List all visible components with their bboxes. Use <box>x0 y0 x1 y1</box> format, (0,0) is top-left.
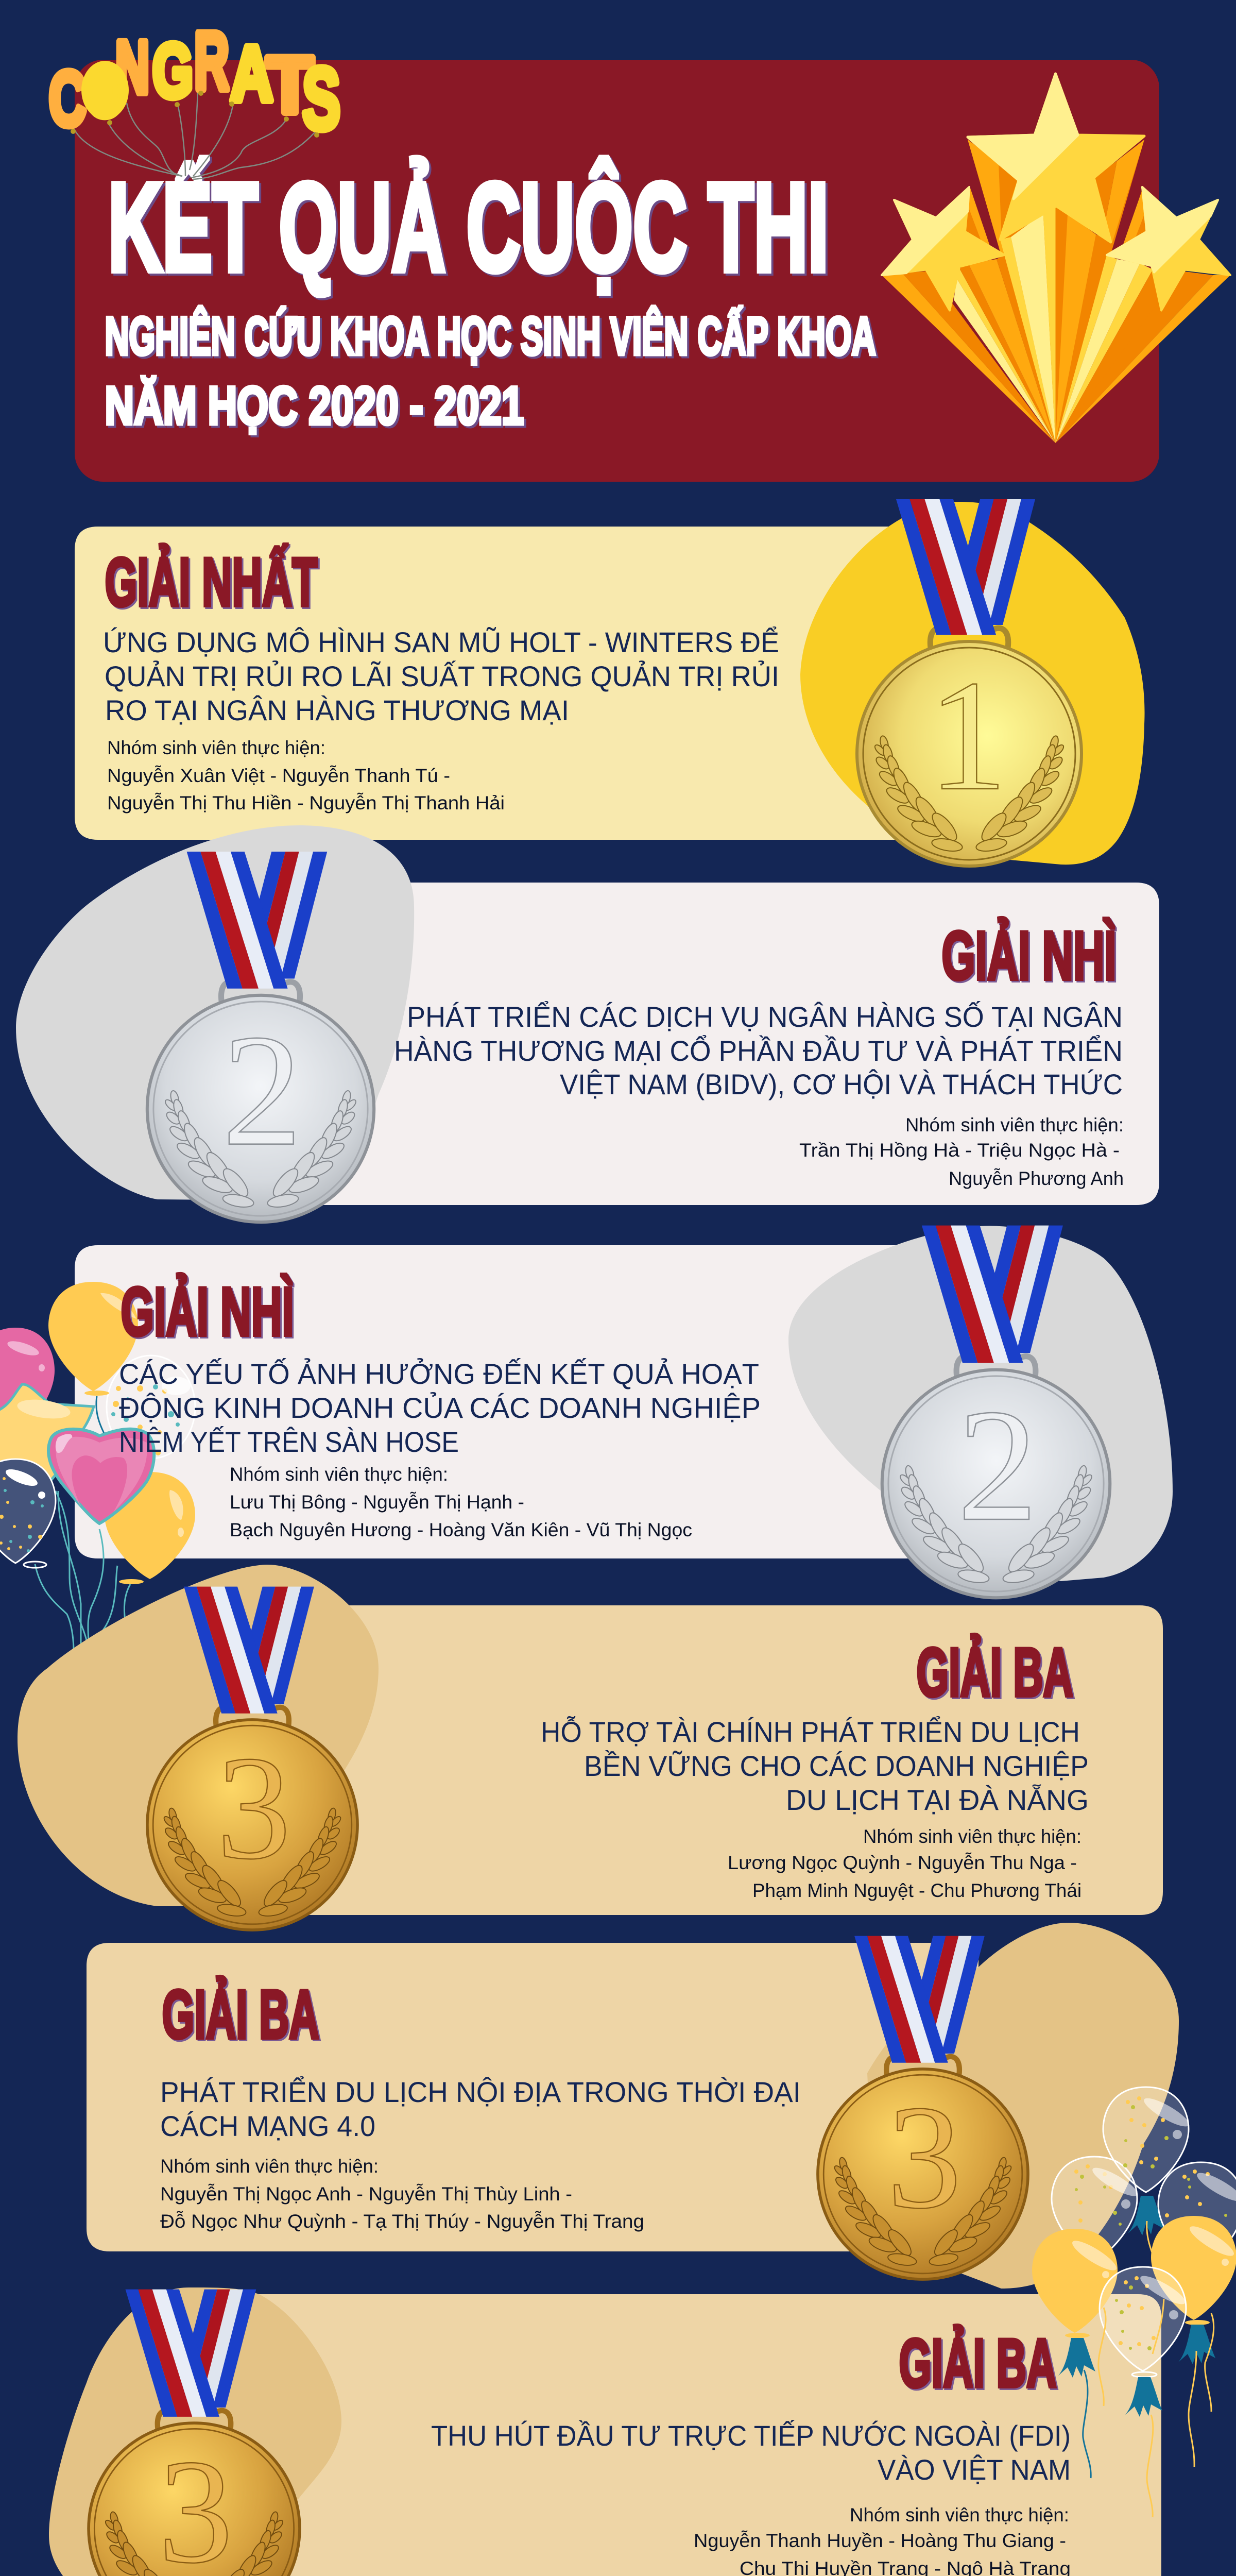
panel: first prize background <box>75 527 927 840</box>
icon: congrats balloons: R <box>194 15 229 107</box>
team <box>799 1114 1124 1189</box>
icon: congrats balloons: S <box>302 50 340 148</box>
project title: VIỆT NAM (BIDV), CƠ HỘI VÀ THÁCH THỨC <box>560 1068 1123 1100</box>
right cone <box>1056 190 1230 443</box>
blob: yellow shape behind gold medal <box>800 502 1145 865</box>
project title <box>431 2419 1071 2486</box>
icon: congrats balloons: G <box>152 28 193 113</box>
panel: third prize B text <box>160 1976 801 2232</box>
big star <box>968 74 1144 242</box>
central cone <box>968 140 1144 443</box>
icon: bronze medal A <box>147 1587 357 1930</box>
project title: HỖ TRỢ TÀI CHÍNH PHÁT TRIỂN DU LỊCH <box>541 1716 1080 1748</box>
icon: congrats balloons: T <box>267 40 313 129</box>
team: Đỗ Ngọc Như Quỳnh - Tạ Thị Thúy - Nguyễn Thị Trang <box>160 2211 644 2232</box>
project title: THU HÚT ĐẦU TƯ TRỰC TIẾP NƯỚC NGOÀI (FDI) <box>431 2419 1071 2452</box>
icon: silver medal A <box>147 852 374 1222</box>
panel: header banner <box>75 60 1159 482</box>
project title <box>119 1358 761 1458</box>
heading: GIẢI BA <box>917 1634 1073 1710</box>
icon: balloons left <box>0 1282 195 1651</box>
project title: PHÁT TRIỂN DU LỊCH NỘI ĐỊA TRONG THỜI ĐẠI <box>160 2076 801 2108</box>
panel: third prize C background <box>206 2294 1161 2576</box>
project title <box>103 626 779 726</box>
heading: GIẢI NHÌ <box>941 917 1117 994</box>
team <box>728 1826 1082 1901</box>
project title: CÁCH MẠNG 4.0 <box>160 2110 375 2142</box>
icon: bronze medal A: 3 <box>217 1726 291 1890</box>
icon: congrats balloons: A <box>230 30 273 117</box>
icon: gold medal 1: 1 <box>928 648 1007 823</box>
panel: second prize B text <box>119 1274 761 1540</box>
team: Bạch Nguyên Hương - Hoàng Văn Kiên - Vũ Thị Ngọc <box>230 1519 692 1540</box>
team: Nhóm sinh viên thực hiện: <box>160 2156 379 2177</box>
team: Trần Thị Hồng Hà - Triệu Ngọc Hà - <box>799 1140 1120 1161</box>
project title: RO TẠI NGÂN HÀNG THƯƠNG MẠI <box>105 694 569 726</box>
heading: GIẢI BA <box>899 2325 1057 2402</box>
panel: third prize A text <box>541 1634 1089 1901</box>
left star <box>882 187 1004 310</box>
project title: BỀN VỮNG CHO CÁC DOANH NGHIỆP <box>584 1750 1089 1782</box>
panel: second prize B background <box>75 1245 927 1558</box>
heading: GIẢI NHẤT <box>105 543 317 620</box>
subtitle line 2: NĂM HỌC 2020 - 2021 <box>105 376 524 436</box>
icon: bronze medal C <box>89 2290 300 2576</box>
team: Nhóm sinh viên thực hiện: <box>850 2504 1069 2526</box>
team: Nguyễn Phương Anh <box>949 1168 1124 1189</box>
blob: tan shape behind bronze medal A <box>18 1565 379 1906</box>
heading: GIẢI NHÌ <box>121 1274 294 1350</box>
team: Nhóm sinh viên thực hiện: <box>863 1826 1082 1847</box>
project title: DU LỊCH TẠI ĐÀ NẴNG <box>786 1784 1089 1816</box>
project title: QUẢN TRỊ RỦI RO LÃI SUẤT TRONG QUẢN TRỊ RỦI <box>105 660 779 692</box>
icon: congrats balloons: C <box>49 55 86 142</box>
team: Lương Ngọc Quỳnh - Nguyễn Thu Nga - <box>728 1852 1077 1873</box>
panel: second prize A text <box>394 917 1124 1189</box>
project title: HÀNG THƯƠNG MẠI CỔ PHẦN ĐẦU TƯ VÀ PHÁT TRIỂN <box>394 1035 1123 1067</box>
panel: third prize B background <box>87 1943 978 2251</box>
icon: silver medal B: 2 <box>957 1376 1038 1554</box>
panel: third prize A background <box>258 1605 1163 1915</box>
project title <box>160 2076 801 2142</box>
project title: PHÁT TRIỂN CÁC DỊCH VỤ NGÂN HÀNG SỐ TẠI NGÂN <box>407 1001 1123 1033</box>
team: Nguyễn Thanh Huyền - Hoàng Thu Giang - <box>694 2530 1066 2551</box>
project title: NIÊM YẾT TRÊN SÀN HOSE <box>119 1426 459 1458</box>
panel: third prize C text <box>431 2325 1071 2576</box>
heading: GIẢI BA <box>162 1976 319 2053</box>
icon: congrats balloons: N <box>115 26 149 109</box>
blob: grey shape behind silver medal B <box>788 1226 1173 1581</box>
team <box>694 2504 1071 2576</box>
left cone <box>882 188 1056 443</box>
icon: foil heart balloon <box>48 1429 154 1523</box>
panel: first prize text <box>103 543 779 814</box>
team: Nguyễn Thị Thu Hiền - Nguyễn Thị Thanh Hải <box>107 792 505 814</box>
icon: bronze medal B: 3 <box>887 2075 962 2240</box>
icon: silver medal B <box>882 1226 1110 1598</box>
panel: second prize A background <box>258 883 1159 1205</box>
blob: tan shape behind bronze medal B <box>867 1923 1179 2289</box>
icon: congrats balloons <box>49 15 340 179</box>
icon: congrats balloons: O <box>85 53 125 131</box>
icon: balloons right <box>1032 2087 1236 2517</box>
team: Nhóm sinh viên thực hiện: <box>230 1464 448 1485</box>
team: Nhóm sinh viên thực hiện: <box>107 737 325 758</box>
project title <box>541 1716 1089 1816</box>
team: Lưu Thị Bông - Nguyễn Thị Hạnh - <box>230 1492 524 1513</box>
right star <box>1107 187 1230 310</box>
icon: shooting stars <box>882 74 1230 443</box>
team: Nhóm sinh viên thực hiện: <box>905 1114 1124 1136</box>
icon: silver medal A: 2 <box>222 1002 302 1179</box>
project title: VÀO VIỆT NAM <box>878 2453 1071 2486</box>
project title: CÁC YẾU TỐ ẢNH HƯỞNG ĐẾN KẾT QUẢ HOẠT <box>119 1358 759 1390</box>
icon: bronze medal B <box>818 1936 1028 2279</box>
team: Nguyễn Xuân Việt - Nguyễn Thanh Tú - <box>107 765 450 786</box>
project title: ĐỘNG KINH DOANH CỦA CÁC DOANH NGHIỆP <box>119 1392 761 1424</box>
team: Phạm Minh Nguyệt - Chu Phương Thái <box>752 1880 1082 1901</box>
project title: ỨNG DỤNG MÔ HÌNH SAN MŨ HOLT - WINTERS ĐỂ <box>103 626 779 658</box>
icon: gold medal 1 <box>857 499 1082 866</box>
team <box>230 1464 692 1540</box>
team <box>160 2156 644 2232</box>
team <box>107 737 505 814</box>
blob: tan shape behind bronze medal C <box>49 2287 341 2576</box>
project title <box>394 1001 1123 1100</box>
team: Nguyễn Thị Ngọc Anh - Nguyễn Thị Thùy Linh - <box>160 2183 572 2205</box>
blob: grey shape behind silver medal A <box>16 825 414 1200</box>
